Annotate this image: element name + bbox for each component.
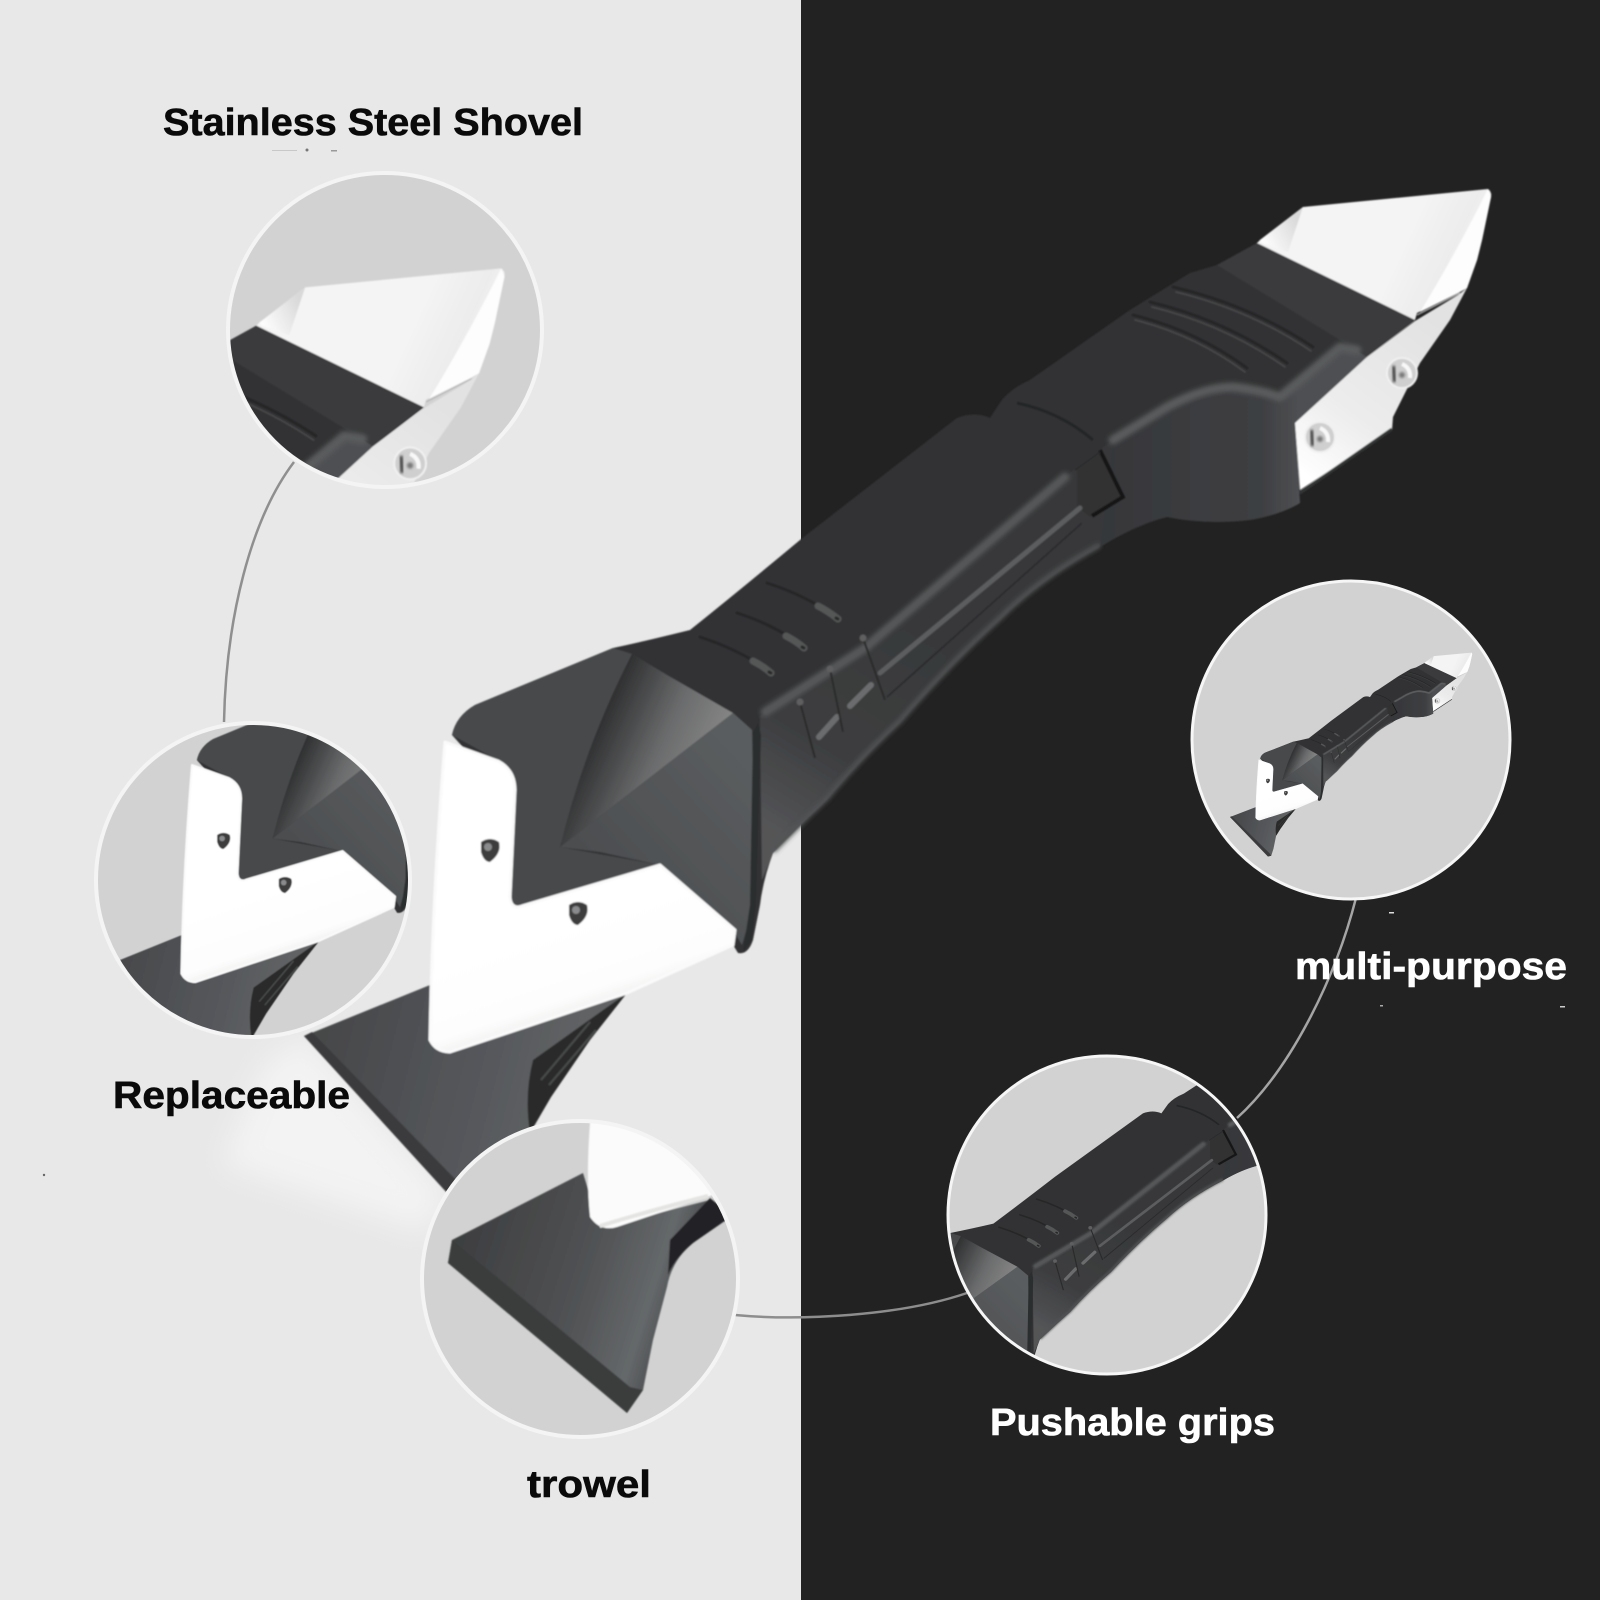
blade screws [1305, 358, 1417, 452]
white scraper rivets [481, 839, 588, 925]
callout circle: stainless steel shovel [226, 171, 544, 489]
white scraper tip [586, 1123, 712, 1230]
scraper head gradient facet [560, 654, 733, 847]
label: Replaceable: Replaceable [113, 1075, 350, 1117]
top head ridge [1113, 347, 1357, 440]
callout circle: trowel [420, 1119, 740, 1439]
steel blade [1257, 189, 1491, 493]
handle body [452, 243, 1415, 953]
handle side face [760, 440, 1113, 880]
top head ribs [1133, 287, 1313, 372]
slider buttons [819, 685, 871, 737]
trowel edge band [448, 1240, 643, 1413]
label: multi-purpose: multi-purpose [1295, 946, 1567, 988]
handle lower edge highlight [773, 545, 1100, 851]
white silicone scraper [430, 742, 735, 1052]
scraper head right facet [560, 713, 755, 945]
main product: caulking tool [304, 189, 1491, 1240]
neck [1217, 243, 1415, 357]
slider notch [1077, 450, 1123, 517]
slider track [880, 508, 1080, 673]
stray image specks [43, 148, 1565, 1176]
trowel blade [304, 985, 627, 1240]
head outer side strip [743, 722, 761, 952]
callout circle: pushable grips [946, 1054, 1268, 1376]
connector: shovel to replaceable [224, 462, 294, 722]
scraper head left facet [452, 648, 660, 907]
label: Pushable grips: Pushable grips [990, 1402, 1275, 1444]
soft glow below trowel [222, 1036, 445, 1232]
panel: light left background [0, 0, 801, 1600]
joint groove [1017, 403, 1093, 440]
grip ribs [700, 583, 838, 673]
panel: dark right background [801, 0, 1600, 1600]
heading: Stainless Steel Shovel: Stainless Steel Shovel [163, 102, 583, 144]
trowel close-up [448, 1173, 720, 1413]
label: trowel: trowel [527, 1464, 651, 1506]
handle top ridge [765, 477, 1065, 712]
top head side face [1100, 347, 1367, 547]
connector: pushable grips to multi-purpose [1237, 898, 1356, 1118]
callout circle: replaceable scraper [94, 721, 412, 1039]
slider dots [796, 634, 885, 758]
connector: trowel to pushable grips [735, 1293, 967, 1317]
callout circle: multi-purpose full tool [1192, 581, 1510, 899]
trowel neck ribs [668, 1198, 725, 1274]
